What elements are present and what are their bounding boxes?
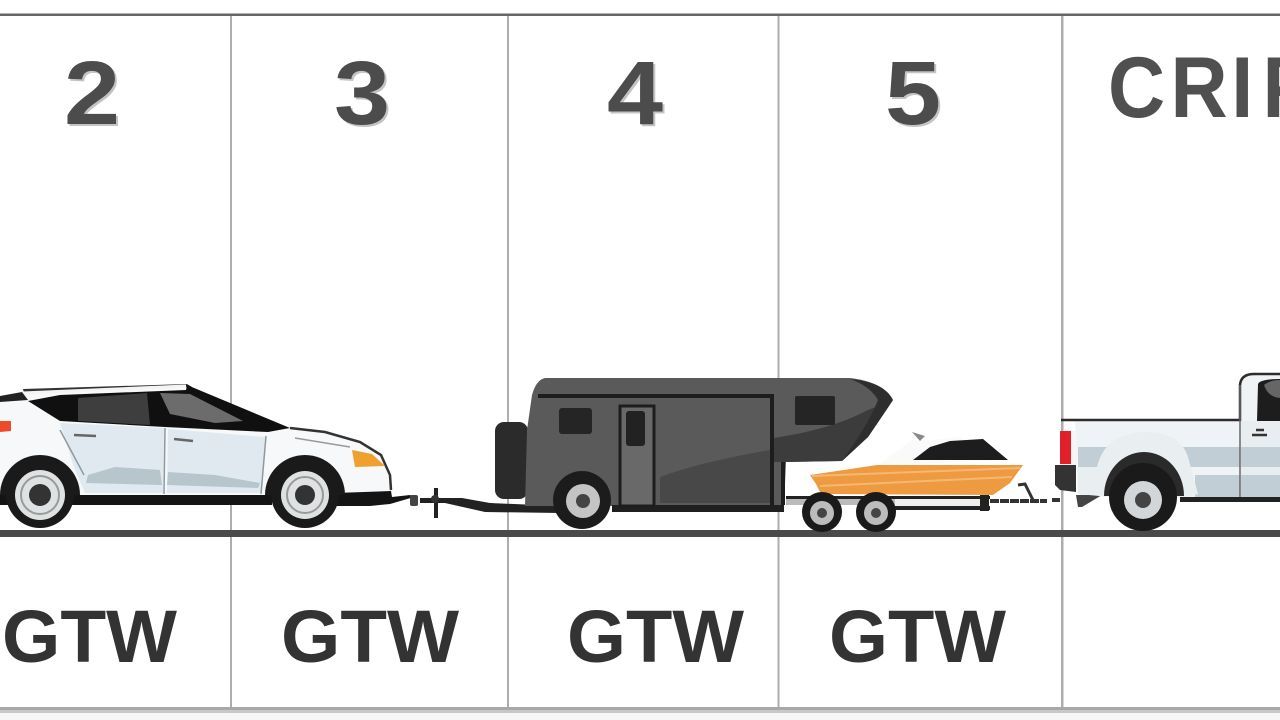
truck wheel: [1104, 452, 1184, 531]
car doors: [60, 423, 164, 493]
heading: 2: 2: [64, 44, 120, 144]
car windows: [28, 385, 290, 432]
label: GTW column 3: GTW: [281, 595, 459, 678]
GTW labels: [2, 595, 1006, 678]
label: GTW column 2: GTW: [2, 595, 177, 678]
camper door: [620, 406, 654, 506]
label: GTW column 4: GTW: [567, 595, 744, 678]
truck body: [1061, 374, 1280, 498]
truck window: [1257, 379, 1280, 421]
truck fender: [1077, 432, 1198, 498]
car front wheel: [265, 455, 345, 528]
car rear wheel: [0, 455, 80, 528]
camper trim: [538, 396, 783, 505]
heading: 5: 5: [887, 46, 943, 146]
vehicle: fifth-wheel camper trailer: [420, 378, 893, 529]
boat trailer frame: [786, 484, 1060, 511]
vehicle: white car: [0, 384, 418, 528]
camper wheel: [553, 471, 611, 529]
camper tongue and jack: [420, 488, 560, 518]
boat trailer wheel 1: [802, 492, 842, 532]
heading: 3: 3: [334, 44, 390, 144]
truck door: [1241, 421, 1280, 497]
heading: 3: 3: [336, 46, 392, 146]
car lights: [352, 450, 385, 467]
boat trailer wheel 2: [856, 492, 896, 532]
truck tail light: [1060, 431, 1077, 465]
heading: 4: 4: [609, 46, 665, 146]
camper body: [525, 378, 893, 506]
car sill and hitch: [0, 491, 414, 506]
boat windshield: [877, 437, 1000, 466]
label: GTW column 5: GTW: [829, 595, 1006, 678]
truck bumper: [1055, 465, 1076, 492]
vehicle: boat on trailer: [786, 432, 1060, 532]
car roof: [23, 384, 192, 393]
camper windows: [559, 408, 592, 434]
truck sill: [1180, 497, 1280, 502]
boat cabin: [913, 439, 1008, 460]
car hood outline: [290, 428, 391, 490]
boat hull: [810, 465, 1023, 495]
vehicle: pickup truck: [1055, 374, 1280, 531]
truck side stripes: [1078, 447, 1240, 498]
heading: 2: 2: [66, 46, 122, 146]
camper spare: [495, 422, 528, 499]
ground line: [0, 530, 1280, 537]
heading: 5: 5: [885, 44, 941, 144]
heading: 4: 4: [607, 44, 663, 144]
column headings: [64, 39, 1280, 146]
